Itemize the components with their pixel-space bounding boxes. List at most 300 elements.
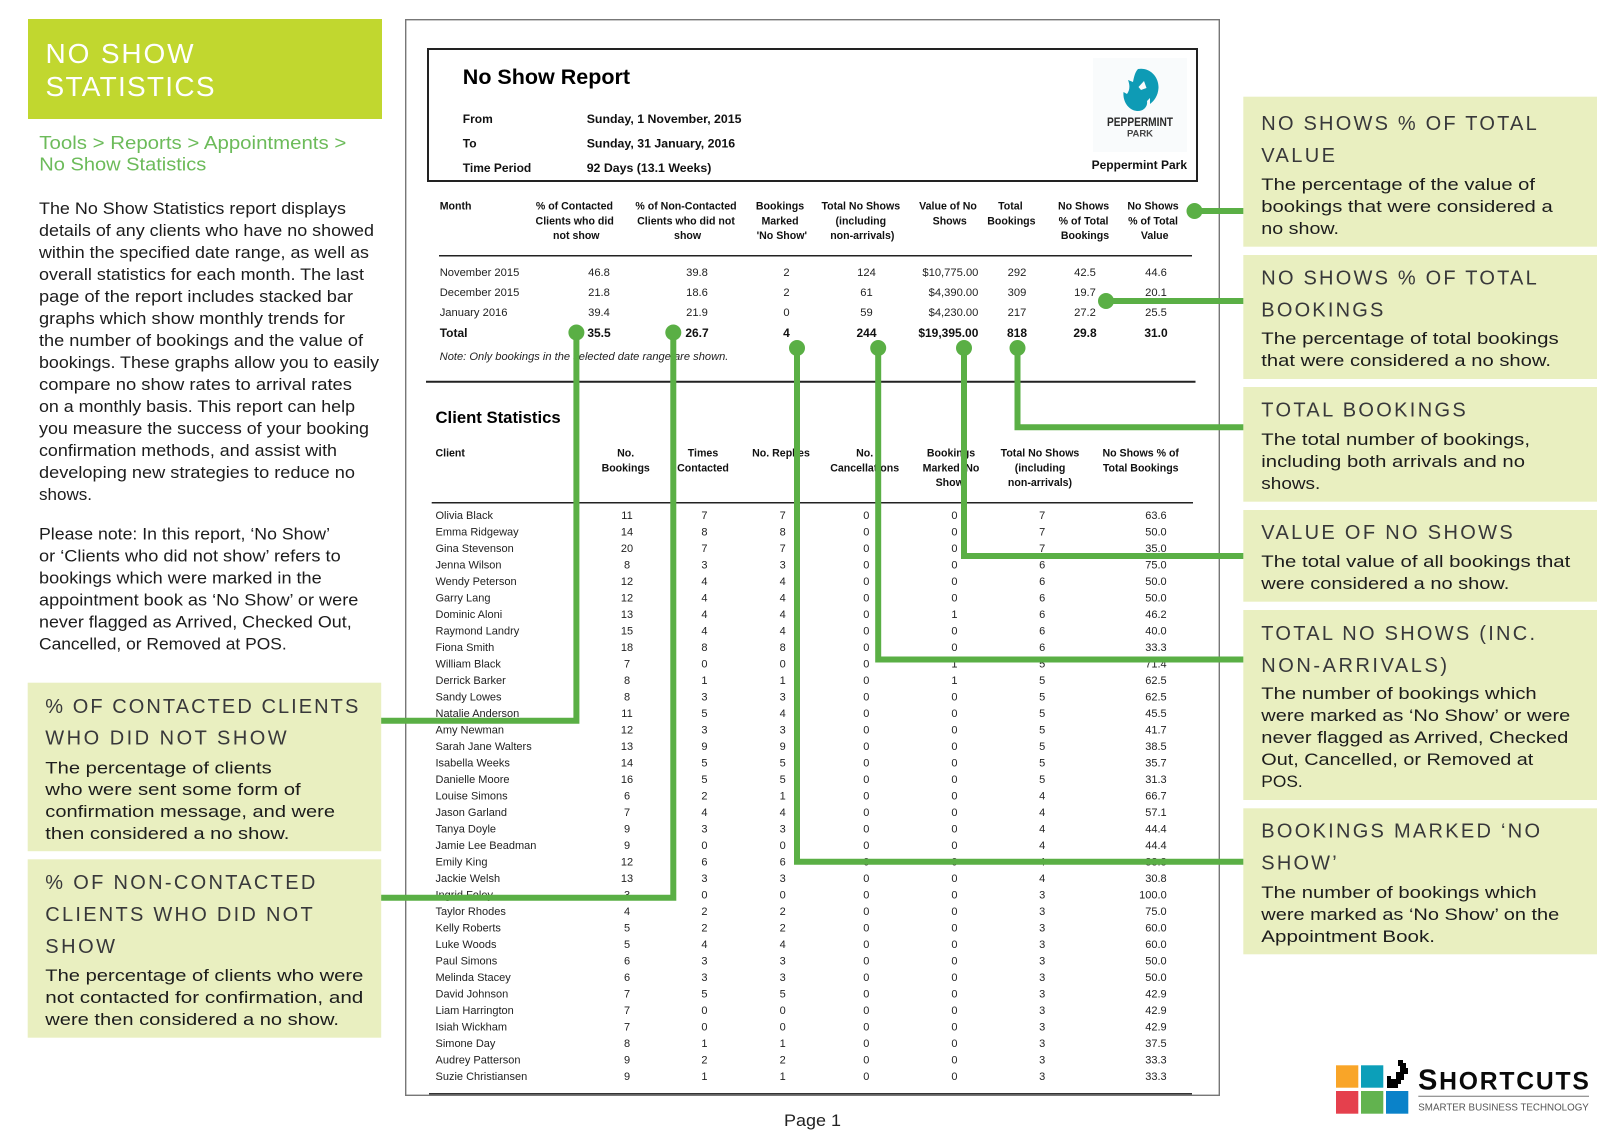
client table header: Bookings xyxy=(602,463,650,475)
client table rows: 8 xyxy=(780,642,786,654)
client table rows: 2 xyxy=(780,1054,786,1066)
client table rows: 14 xyxy=(621,526,633,538)
client table rows: Taylor Rhodes xyxy=(436,906,506,918)
client table rows: 60.0 xyxy=(1145,922,1167,934)
panel: no shows % of total value: bookings that were considered a xyxy=(1261,197,1553,216)
client table rows: 0 xyxy=(863,807,869,819)
client table rows: David Johnson xyxy=(436,988,508,1000)
client table rows: 0 xyxy=(951,1038,957,1050)
client table rows: 7 xyxy=(701,510,707,522)
client table rows: 6 xyxy=(624,790,630,802)
client table rows: Kelly Roberts xyxy=(436,922,501,934)
panel: no shows % of total value: VALUE xyxy=(1261,145,1335,167)
client table rows: 5 xyxy=(1039,691,1045,703)
client table header: Contacted xyxy=(677,463,729,475)
client table rows: 0 xyxy=(951,873,957,885)
summary table header: 'No Show' xyxy=(757,230,807,242)
client table rows: 3 xyxy=(1039,1071,1045,1083)
client table rows: 0 xyxy=(951,1071,957,1083)
client table rows: 4 xyxy=(1039,823,1045,835)
row: November 2015: 2 xyxy=(783,267,790,279)
client table rows: Ingrid Foley xyxy=(436,889,493,901)
client table rows: 0 xyxy=(863,823,869,835)
panel: bookings marked no show: SHOW’ xyxy=(1261,853,1337,875)
client table rows: 7 xyxy=(1039,510,1045,522)
client table rows: Fiona Smith xyxy=(436,642,494,654)
client table rows: 0 xyxy=(863,856,869,868)
client table rows: 62.5 xyxy=(1145,675,1167,687)
client table rows: 2 xyxy=(701,906,707,918)
row: November 2015: 292 xyxy=(1008,267,1026,279)
client table rows: 0 xyxy=(951,790,957,802)
client table rows: 9 xyxy=(624,840,630,852)
client table rows: 5 xyxy=(1039,675,1045,687)
client table rows: 0 xyxy=(863,1021,869,1033)
client table rows: 5 xyxy=(780,757,786,769)
client table rows: 0 xyxy=(780,658,786,670)
client table header: No. Replies xyxy=(752,448,810,460)
report header box: Peppermint Park xyxy=(1092,158,1187,172)
client table rows: 2 xyxy=(701,790,707,802)
client table rows: 7 xyxy=(1039,526,1045,538)
client table rows: 4 xyxy=(1039,807,1045,819)
client table rows: 3 xyxy=(780,873,786,885)
panel: % of non-contacted clients who did not show: were then considered a no show. xyxy=(44,1010,339,1029)
client table rows: Garry Lang xyxy=(436,592,491,604)
client table rows: Paul Simons xyxy=(436,955,498,967)
panel: value of no shows xyxy=(1243,510,1597,602)
report header box: Time Period xyxy=(463,161,531,175)
row: Total: 4 xyxy=(783,326,790,340)
summary table header: Shows xyxy=(933,216,967,228)
client table rows: Sarah Jane Walters xyxy=(436,741,532,753)
row: November 2015 xyxy=(440,267,1167,279)
client table rows: 0 xyxy=(951,774,957,786)
client table rows: 0 xyxy=(951,592,957,604)
client table rows: 14 xyxy=(621,757,633,769)
row: December 2015: 18.6 xyxy=(686,287,708,299)
client table rows: 3 xyxy=(701,691,707,703)
client table rows: 8 xyxy=(624,559,630,571)
client table rows: 4 xyxy=(1039,840,1045,852)
client table rows: Danielle Moore xyxy=(436,774,509,786)
client table rows: Jason Garland xyxy=(436,807,507,819)
note paragraph: never flagged as Arrived, Checked Out, xyxy=(39,612,352,631)
client table rows: 0 xyxy=(951,823,957,835)
client table rows: 3 xyxy=(701,972,707,984)
client table rows: 3 xyxy=(701,559,707,571)
client table rows: 0 xyxy=(951,1005,957,1017)
connector: % of contacted clients xyxy=(381,324,584,721)
client table rows: 13 xyxy=(621,609,633,621)
client table rows: 0 xyxy=(863,840,869,852)
row: January 2016: 39.4 xyxy=(588,307,610,319)
note paragraph: or ‘Clients who did not show’ refers to xyxy=(39,546,341,565)
client table header: Marked 'No xyxy=(923,463,980,475)
panel: bookings marked no show: BOOKINGS MARKED ‘NO xyxy=(1261,820,1540,842)
panel: no shows % of total bookings: NO SHOWS % OF TOTAL xyxy=(1261,268,1537,290)
client table rows: 5 xyxy=(1039,757,1045,769)
panel: value of no shows: The total value of all bookings that xyxy=(1261,552,1571,571)
client table rows: 4 xyxy=(701,939,707,951)
client table rows: 9 xyxy=(624,823,630,835)
client table rows: 3 xyxy=(1039,955,1045,967)
client table rows: 35.7 xyxy=(1145,757,1167,769)
client table rows: 11 xyxy=(621,708,633,720)
intro paragraph: shows. xyxy=(39,485,92,504)
panel: no shows % of total bookings xyxy=(1243,255,1597,379)
Shortcuts logo: SMARTER BUSINESS TECHNOLOGY xyxy=(1418,1101,1589,1113)
client table header: No. xyxy=(856,448,873,460)
client table rows: 3 xyxy=(701,823,707,835)
client table rows: 0 xyxy=(863,790,869,802)
client table rows: 44.4 xyxy=(1145,840,1167,852)
row: Total: 818 xyxy=(1007,326,1027,340)
client table rows: 8 xyxy=(780,526,786,538)
client table rows: 0 xyxy=(701,889,707,901)
client table rows: 0 xyxy=(951,543,957,555)
client table rows: 0 xyxy=(780,840,786,852)
intro paragraph xyxy=(38,199,380,504)
client table rows: 0 xyxy=(951,972,957,984)
client table rows: 5 xyxy=(701,757,707,769)
client table header: No Shows % of xyxy=(1102,448,1179,460)
row: November 2015: $10,775.00 xyxy=(922,267,978,279)
connector: % of non-contacted clients xyxy=(381,324,681,898)
client table rows: 1 xyxy=(780,1071,786,1083)
panel: total bookings: shows. xyxy=(1261,474,1320,493)
icon: Peppermint Park logo: PARK xyxy=(1127,128,1153,140)
client table rows: 4 xyxy=(624,906,630,918)
client table header xyxy=(436,448,1179,489)
client table rows: 0 xyxy=(951,708,957,720)
client table rows: 50.0 xyxy=(1145,972,1167,984)
client table rows: Amy Newman xyxy=(436,724,504,736)
client table rows: 8 xyxy=(701,642,707,654)
summary table header: Clients who did xyxy=(536,216,614,228)
client table rows: 11 xyxy=(621,510,633,522)
client table rows: 3 xyxy=(1039,988,1045,1000)
client table header: Times xyxy=(688,448,718,460)
client table rows: 50.0 xyxy=(1145,592,1167,604)
client table rows: 71.4 xyxy=(1145,658,1167,670)
client table rows: 0 xyxy=(951,757,957,769)
panel: % of non-contacted clients who did not show: CLIENTS WHO DID NOT xyxy=(45,904,313,926)
client table rows: Louise Simons xyxy=(436,790,508,802)
client table header: Total No Shows xyxy=(1001,448,1079,460)
client table rows: 60.0 xyxy=(1145,939,1167,951)
client table rows: 12 xyxy=(621,592,633,604)
panel: total no shows (inc. non-arrivals): TOTAL NO SHOWS (INC. xyxy=(1261,623,1535,645)
icon: Peppermint Park logo: PEPPERMINT xyxy=(1107,117,1173,129)
client table rows: 3 xyxy=(1039,1021,1045,1033)
client table rows: 20 xyxy=(621,543,633,555)
panel: total no shows (inc. non-arrivals): Out, Cancelled, or Removed at xyxy=(1261,750,1534,769)
summary table header: (including xyxy=(835,216,886,228)
client table rows: 3 xyxy=(1039,972,1045,984)
report header box: To xyxy=(463,136,477,150)
row: Total: 35.5 xyxy=(587,326,611,340)
breadcrumb navigation path xyxy=(39,133,346,175)
row: December 2015: 61 xyxy=(860,287,873,299)
summary table header: % of Contacted xyxy=(536,200,613,212)
connector: value of no shows xyxy=(956,340,1244,556)
title block xyxy=(28,19,382,119)
client table header: Cancellations xyxy=(830,463,899,475)
intro paragraph: page of the report includes stacked bar xyxy=(39,287,353,306)
client table rows: 0 xyxy=(863,1038,869,1050)
intro paragraph: graphs which show monthly trends for xyxy=(39,309,345,328)
client table header: No. xyxy=(617,448,634,460)
report header box: Sunday, 31 January, 2016 xyxy=(587,136,735,150)
client table rows: 5 xyxy=(1039,708,1045,720)
intro paragraph: The No Show Statistics report displays xyxy=(39,199,346,218)
client table rows: 33.3 xyxy=(1145,1071,1167,1083)
panel: total bookings: including both arrivals and no xyxy=(1261,452,1525,471)
client table rows: 37.5 xyxy=(1145,1038,1167,1050)
row: January 2016: January 2016 xyxy=(440,307,508,319)
summary table header: Bookings xyxy=(1061,230,1109,242)
client table rows: 42.9 xyxy=(1145,1005,1167,1017)
client table rows: 42.9 xyxy=(1145,1021,1167,1033)
client table rows: 13 xyxy=(621,873,633,885)
client table rows: 5 xyxy=(624,939,630,951)
panel: % of contacted clients who did not show: WHO DID NOT SHOW xyxy=(45,727,287,749)
intro paragraph: on a monthly basis. This report can help xyxy=(39,397,355,416)
row: January 2016: $4,230.00 xyxy=(929,307,978,319)
client table rows: 0 xyxy=(701,840,707,852)
client table rows: Suzie Christiansen xyxy=(436,1071,527,1083)
client table rows: 0 xyxy=(951,906,957,918)
client table rows: Olivia Black xyxy=(436,510,493,522)
client table rows: 7 xyxy=(780,543,786,555)
client table rows: 38.5 xyxy=(1145,741,1167,753)
breadcrumb navigation path: Tools > Reports > Appointments > xyxy=(39,133,346,153)
client table rows: 0 xyxy=(863,592,869,604)
client table rows: 3 xyxy=(1039,906,1045,918)
panel: no shows % of total bookings: that were considered a no show. xyxy=(1261,351,1551,370)
client table rows: 0 xyxy=(863,642,869,654)
client table rows: 4 xyxy=(780,592,786,604)
client table rows: 1 xyxy=(701,1038,707,1050)
panel: % of contacted clients who did not show: confirmation message, and were xyxy=(45,802,335,821)
panel: no shows % of total bookings: BOOKINGS xyxy=(1261,300,1383,322)
client table rows: 4 xyxy=(701,807,707,819)
row: January 2016: 27.2 xyxy=(1074,307,1096,319)
client table rows: 0 xyxy=(863,1054,869,1066)
intro paragraph: the number of bookings and the value of xyxy=(39,331,363,350)
client table rows: Tanya Doyle xyxy=(436,823,496,835)
client table rows: 2 xyxy=(780,906,786,918)
client table rows: 0 xyxy=(951,510,957,522)
client table rows: 0 xyxy=(863,559,869,571)
client table rows: 30.8 xyxy=(1145,873,1167,885)
panel: total bookings: TOTAL BOOKINGS xyxy=(1261,400,1466,422)
client table rows: 1 xyxy=(701,675,707,687)
client table rows: 0 xyxy=(951,807,957,819)
row: December 2015: 21.8 xyxy=(588,287,610,299)
client table rows: 3 xyxy=(701,955,707,967)
monthly summary table xyxy=(439,200,1192,363)
client table rows: 0 xyxy=(951,856,957,868)
panel: total no shows (inc. non-arrivals) xyxy=(1243,610,1597,800)
connector: total bookings xyxy=(1010,340,1244,427)
panel: no shows % of total value: NO SHOWS % OF TOTAL xyxy=(1261,113,1537,135)
icon: coloured squares xyxy=(1336,1060,1408,1114)
client table header: Show' xyxy=(936,477,966,489)
client table rows: 0 xyxy=(951,1054,957,1066)
row: Total: $19,395.00 xyxy=(918,326,979,340)
client table rows: 0 xyxy=(863,691,869,703)
client table rows: 6 xyxy=(780,856,786,868)
Shortcuts logo: SHORTCUTS xyxy=(1418,1064,1591,1096)
title block: STATISTICS xyxy=(46,71,214,102)
client table rows: 3 xyxy=(701,724,707,736)
row: Total: Total xyxy=(440,326,467,340)
summary table header: Marked xyxy=(761,216,799,228)
client table rows: 3 xyxy=(1039,1038,1045,1050)
client table rows: 6 xyxy=(1039,576,1045,588)
icon: Peppermint Park logo xyxy=(1093,58,1187,152)
note paragraph: Please note: In this report, ‘No Show’ xyxy=(39,524,330,543)
client table rows: 3 xyxy=(780,955,786,967)
panel: value of no shows: VALUE OF NO SHOWS xyxy=(1261,522,1513,544)
client table rows: 0 xyxy=(951,691,957,703)
row: December 2015: $4,390.00 xyxy=(929,287,978,299)
client table rows: 3 xyxy=(1039,1054,1045,1066)
client table header: Client xyxy=(436,448,465,460)
report header box: No Show Report xyxy=(463,65,630,89)
client table rows: 66.7 xyxy=(1145,790,1167,802)
summary table header: % of Non-Contacted xyxy=(635,200,737,212)
client table rows: 15 xyxy=(621,625,633,637)
client table rows: 0 xyxy=(863,543,869,555)
client table rows: Wendy Peterson xyxy=(436,576,517,588)
client table rows: 0 xyxy=(863,708,869,720)
panel: bookings marked no show: were marked as ‘No Show’ on the xyxy=(1260,905,1559,924)
client table rows: Emma Ridgeway xyxy=(436,526,519,538)
intro paragraph: developing new strategies to reduce no xyxy=(39,463,355,482)
panel: % of contacted clients who did not show xyxy=(28,683,381,851)
client table rows: 0 xyxy=(863,955,869,967)
client table rows: 0 xyxy=(701,1005,707,1017)
panel: no shows % of total bookings: The percentage of total bookings xyxy=(1261,329,1559,348)
client table rows: 9 xyxy=(780,741,786,753)
summary table header: Bookings xyxy=(987,216,1036,228)
client table rows: 4 xyxy=(701,592,707,604)
client table rows: 0 xyxy=(780,1005,786,1017)
client table rows: 0 xyxy=(863,724,869,736)
client table rows: 9 xyxy=(701,741,707,753)
client table rows: 1 xyxy=(951,675,957,687)
title block: NO SHOW xyxy=(46,38,194,69)
client table rows: 18 xyxy=(621,642,633,654)
client table rows: 0 xyxy=(863,972,869,984)
client table rows: Gina Stevenson xyxy=(436,543,514,555)
client table rows: 13 xyxy=(621,741,633,753)
client table rows: 0 xyxy=(951,988,957,1000)
client table rows: 7 xyxy=(624,988,630,1000)
summary table header xyxy=(440,200,1179,242)
client table header: (including xyxy=(1015,463,1065,475)
client table rows: 0 xyxy=(863,675,869,687)
intro paragraph: details of any clients who have no showed xyxy=(39,221,374,240)
client table rows: 7 xyxy=(624,658,630,670)
client table rows: 5 xyxy=(1039,658,1045,670)
client table rows: 0 xyxy=(863,922,869,934)
client table rows: 0 xyxy=(863,1071,869,1083)
client table rows: 7 xyxy=(624,1005,630,1017)
panel: total bookings xyxy=(1243,387,1597,502)
client table rows: 0 xyxy=(951,526,957,538)
client table rows: 62.5 xyxy=(1145,691,1167,703)
client table rows: 35.0 xyxy=(1145,543,1167,555)
panel: bookings marked no show xyxy=(1243,808,1597,954)
client table rows: 100.0 xyxy=(1139,889,1167,901)
client statistics heading: Client Statistics xyxy=(436,408,561,427)
client table rows: 33.3 xyxy=(1145,642,1167,654)
row: November 2015: 46.8 xyxy=(588,267,610,279)
client table rows: 5 xyxy=(701,774,707,786)
client table rows: William Black xyxy=(436,658,501,670)
panel: % of non-contacted clients who did not show: not contacted for confirmation, and xyxy=(45,988,363,1007)
page number: Page 1 xyxy=(784,1111,841,1130)
intro paragraph: bookings. These graphs allow you to easily xyxy=(39,353,380,372)
client table rows: 6 xyxy=(624,972,630,984)
client table rows: 3 xyxy=(780,691,786,703)
client table rows: 33.3 xyxy=(1145,1054,1167,1066)
client table rows: 7 xyxy=(780,510,786,522)
client table rows: Raymond Landry xyxy=(436,625,520,637)
client table rows: 3 xyxy=(624,889,630,901)
client table rows: 0 xyxy=(951,955,957,967)
connector: no shows % of total value xyxy=(1186,203,1244,219)
client table rows: 5 xyxy=(1039,774,1045,786)
row: January 2016: 25.5 xyxy=(1145,307,1167,319)
panel: no shows % of total value: The percentage of the value of xyxy=(1261,175,1535,194)
client table rows: 0 xyxy=(780,1021,786,1033)
intro paragraph: confirmation methods, and assist with xyxy=(39,441,337,460)
panel: no shows % of total value xyxy=(1243,97,1597,247)
client table rows: 75.0 xyxy=(1145,559,1167,571)
client table rows: 4 xyxy=(701,576,707,588)
client table rows: 4 xyxy=(1039,856,1045,868)
panel: % of contacted clients who did not show: The percentage of clients xyxy=(45,758,272,777)
summary table header: not show xyxy=(553,230,600,242)
client table rows: 0 xyxy=(863,873,869,885)
client table rows: 0 xyxy=(701,658,707,670)
panel: bookings marked no show: The number of bookings which xyxy=(1261,883,1537,902)
client table rows: 0 xyxy=(951,625,957,637)
report header box: Sunday, 1 November, 2015 xyxy=(587,112,742,126)
note paragraph: bookings which were marked in the xyxy=(39,568,322,587)
client table rows: 4 xyxy=(1039,790,1045,802)
client table rows: 0 xyxy=(701,1021,707,1033)
client table rows: 7 xyxy=(624,807,630,819)
client table rows: 4 xyxy=(701,609,707,621)
client table rows: 0 xyxy=(863,757,869,769)
client table rows: 7 xyxy=(624,1021,630,1033)
panel: value of no shows: were considered a no show. xyxy=(1260,574,1509,593)
client table rows: 0 xyxy=(863,609,869,621)
client table header: non-arrivals) xyxy=(1008,477,1072,489)
panel: bookings marked no show: Appointment Book. xyxy=(1261,927,1435,946)
client table rows: 5 xyxy=(1039,741,1045,753)
summary table header: show xyxy=(674,230,702,242)
summary table header: % of Total xyxy=(1128,216,1178,228)
client table rows: Audrey Patterson xyxy=(436,1054,520,1066)
client table rows: 8 xyxy=(701,526,707,538)
